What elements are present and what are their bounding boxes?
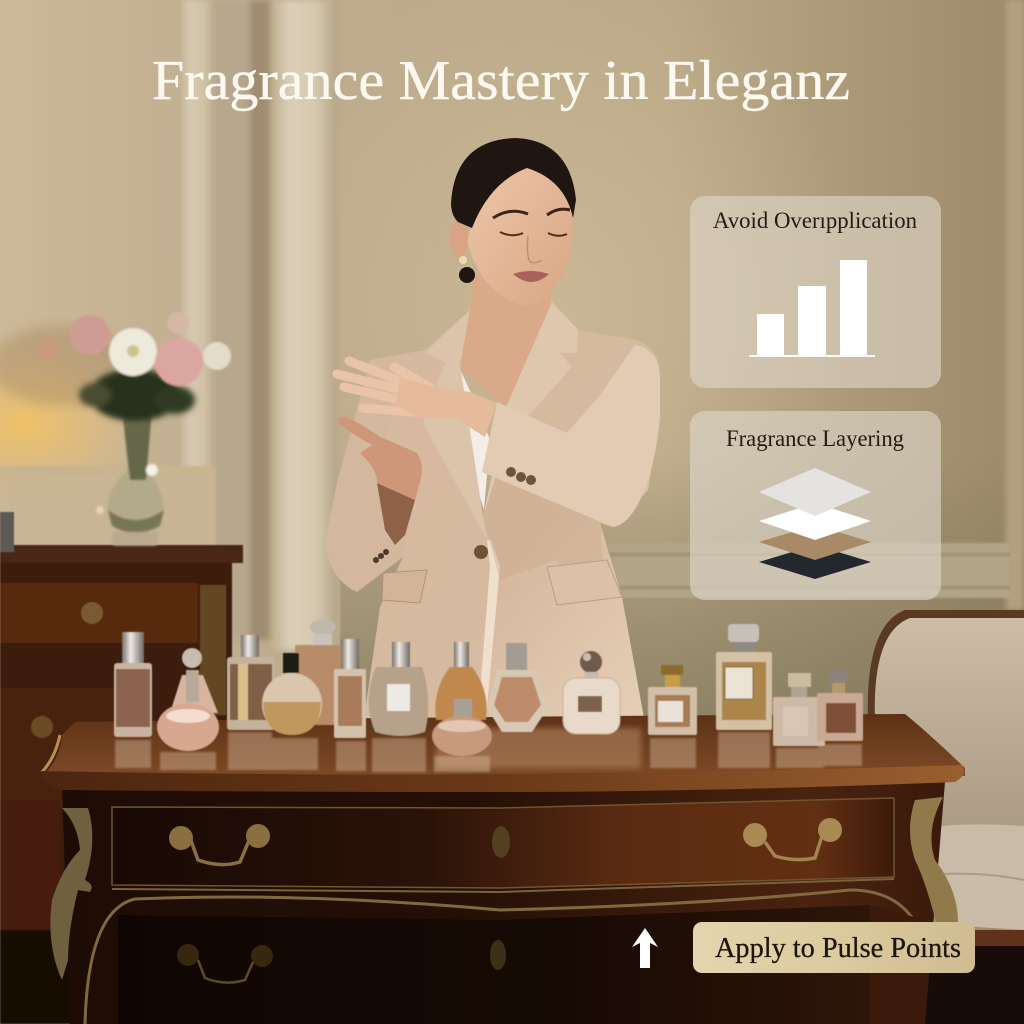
bottle 4: [295, 619, 342, 725]
panel heading: fragrance layering: Fragrance Layering: [726, 426, 904, 451]
bottle 2: [157, 648, 219, 751]
bottle 8: [435, 642, 487, 720]
lower hand: [338, 417, 422, 500]
upper handles: [190, 836, 822, 865]
bottle 6: [334, 639, 366, 738]
upper hand: [337, 361, 497, 437]
bottle 15: [817, 670, 863, 741]
bottle 13: [716, 624, 772, 730]
left ornament: [50, 808, 92, 980]
panel heading: avoid overapplication: Avoid Overıpplication: [713, 208, 917, 233]
layers diagram: [759, 468, 871, 579]
table leg right: [870, 905, 925, 1024]
bar chart: [749, 260, 875, 357]
right sleeve: [482, 345, 660, 527]
bottle 10: [487, 643, 548, 732]
bottle 7: [369, 642, 428, 736]
bottle reflections on table: [115, 732, 862, 772]
bottle 11: [563, 651, 620, 734]
perfume bottles: [114, 619, 863, 756]
hair: [451, 138, 576, 228]
lower handle: [177, 944, 273, 983]
head: [467, 168, 573, 306]
left wrist shadow: [377, 483, 415, 545]
left cabinet: [0, 512, 243, 1024]
bottle 14: [773, 673, 825, 746]
earring: [459, 256, 467, 264]
bottle 1: [114, 632, 152, 737]
title: Fragrance Mastery in Eleganz: [152, 50, 850, 112]
bottle 5: [262, 653, 322, 735]
table: drawer body: [42, 765, 964, 1024]
keyholes: [492, 826, 510, 858]
right pocket: [547, 560, 622, 605]
right cuff buttons: [506, 467, 536, 485]
left sleeve: [325, 360, 415, 592]
lower drawer: [118, 905, 870, 1024]
table: top surface: [42, 714, 965, 776]
bottle 9: [432, 699, 492, 756]
arrow: pointing up: [632, 928, 658, 968]
armchair: [868, 610, 1024, 1024]
blouse: [458, 365, 490, 510]
callout: apply to pulse points: [693, 922, 975, 973]
neck and chest: [458, 275, 562, 408]
left cuff buttons: [373, 549, 389, 563]
panel: fragrance layering: [690, 411, 941, 600]
left pocket: [382, 570, 427, 603]
flower vase: [38, 312, 231, 546]
woman: [325, 138, 660, 718]
jacket torso: [337, 302, 660, 718]
bottle 3: [227, 635, 275, 730]
upper drawer: [112, 798, 894, 888]
hair bun: [459, 267, 475, 283]
face features: [493, 209, 570, 282]
right ornament: [910, 797, 958, 922]
ear: [450, 218, 468, 258]
callout: apply to pulse points: Apply to Pulse Points: [715, 932, 961, 964]
bottle 12: [648, 665, 697, 735]
panel: avoid overapplication: [690, 196, 941, 388]
